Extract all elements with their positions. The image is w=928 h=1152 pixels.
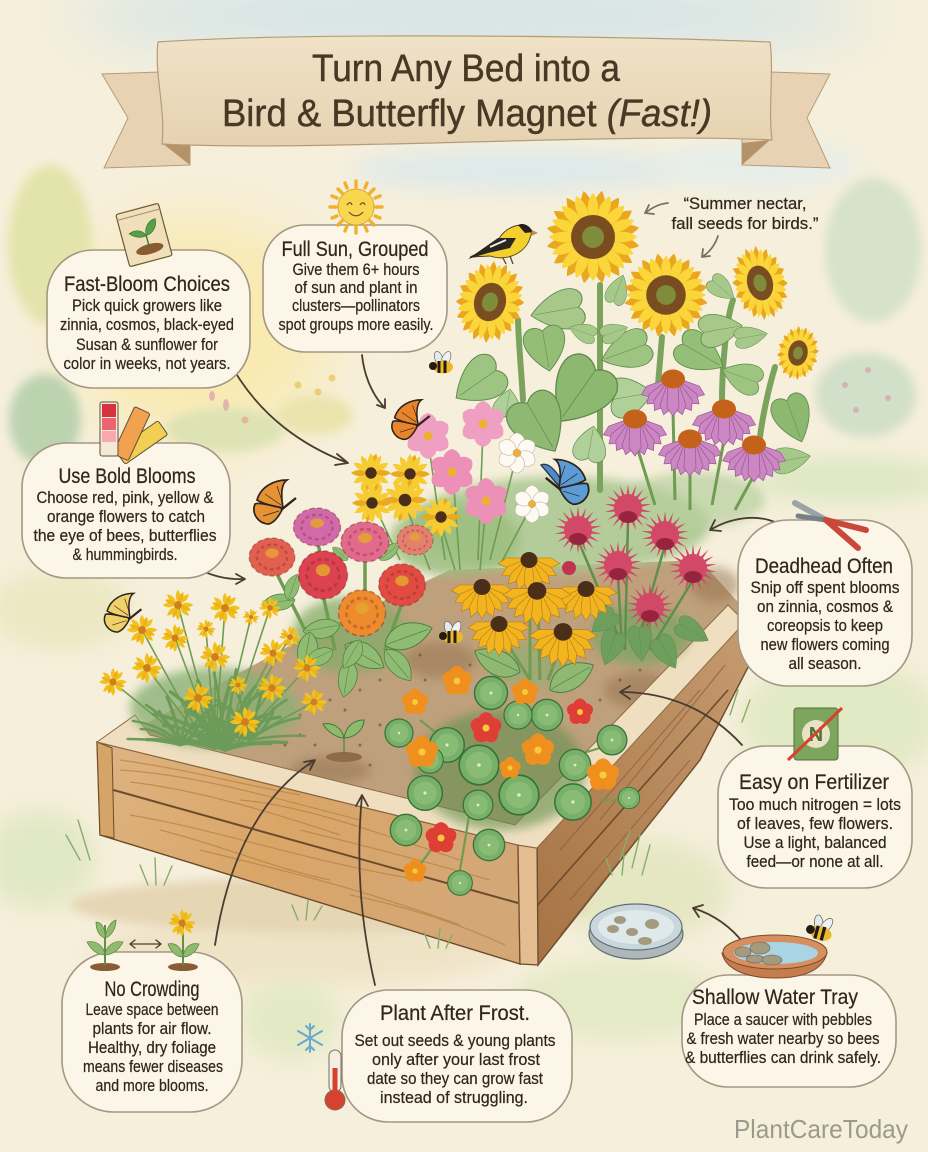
panel: plant after frost [342, 990, 572, 1122]
icon: spacing plants [87, 909, 199, 971]
zinnias [249, 508, 436, 699]
quote [672, 194, 819, 233]
body: bold blooms: Choose red, pink, yellow & [36, 489, 214, 507]
panel: deadhead often [738, 520, 912, 686]
butterfly: blue [541, 459, 589, 504]
coneflowers [601, 370, 788, 510]
bee balm with foliage [554, 484, 717, 674]
heading: deadhead: Deadhead Often [755, 554, 893, 578]
title banner [102, 36, 830, 168]
title text: Turn Any Bed into a [312, 48, 621, 90]
body: fertilizer: feed—or none at all. [746, 853, 884, 871]
icon: smiling sun [330, 181, 382, 233]
body: water tray [685, 1011, 881, 1067]
right face [537, 620, 757, 965]
panel: full sun [263, 225, 447, 352]
leaves [606, 373, 656, 420]
body: frost: Set out seeds & young plants [354, 1032, 556, 1050]
body: deadhead: coreopsis to keep [767, 617, 883, 635]
left tree wash [8, 165, 92, 325]
title text [222, 48, 712, 135]
sunflowers [439, 182, 827, 490]
body: no crowding: Leave space between [86, 1001, 218, 1019]
heading: fertilizer: Easy on Fertilizer [739, 770, 889, 794]
arrows [195, 203, 775, 985]
icon: pruners [795, 503, 866, 548]
body: bold blooms: & hummingbirds. [72, 546, 178, 564]
body: fertilizer: of leaves, few flowers. [737, 815, 893, 833]
goldfinch [468, 224, 538, 264]
body: water tray: & butterflies can drink safely. [685, 1049, 881, 1067]
icon: snowflake [298, 1024, 322, 1052]
body: frost: only after your last frost [372, 1051, 540, 1069]
panel: easy on fertilizer [718, 746, 912, 888]
body: full sun: clusters—pollinators [292, 297, 420, 315]
heading: full sun: Full Sun, Grouped [282, 237, 428, 261]
panel: fast-bloom choices [47, 250, 250, 388]
body: frost: instead of struggling. [380, 1089, 528, 1107]
body: no crowding [83, 1001, 223, 1095]
body: frost: date so they can grow fast [367, 1070, 543, 1088]
stems [518, 285, 775, 490]
body: fertilizer: Use a light, balanced [744, 834, 886, 852]
rim [97, 605, 745, 848]
foliage wash behind flowers [292, 472, 765, 687]
body: bold blooms: the eye of bees, butterflies [34, 527, 216, 545]
watermark: PlantCareToday [734, 1114, 908, 1144]
body: deadhead: Snip off spent blooms [750, 579, 900, 597]
body: no crowding: plants for air flow. [92, 1020, 212, 1038]
icon: fertilizer bag: N [809, 724, 823, 746]
body: fast-bloom: Susan & sunflower for [76, 336, 218, 354]
body: fertilizer: Too much nitrogen = lots [729, 796, 901, 814]
soil [125, 560, 745, 835]
body: no crowding: and more blooms. [96, 1077, 208, 1095]
icon: fertilizer bag [788, 708, 842, 760]
body: fast-bloom: zinnia, cosmos, black-eyed [60, 316, 234, 334]
heading: bold blooms: Use Bold Blooms [58, 464, 196, 488]
icon: terracotta dish with bee [722, 911, 836, 978]
body: fast-bloom: Pick quick growers like [72, 297, 222, 315]
right tree wash [825, 178, 921, 322]
grass tufts [66, 662, 865, 948]
heading: no crowding: No Crowding [104, 977, 200, 1001]
body: deadhead [750, 579, 900, 673]
body: fast-bloom: color in weeks, not years. [64, 355, 230, 373]
body: bold blooms [34, 489, 216, 564]
body: deadhead: new flowers coming [760, 636, 890, 654]
heading: frost: Plant After Frost. [380, 1001, 530, 1025]
large black-eyed susans [451, 552, 617, 700]
raised wooden bed [70, 560, 757, 965]
body: no crowding: means fewer diseases [83, 1058, 223, 1076]
body: water tray: Place a saucer with pebbles [694, 1011, 872, 1029]
icon: color swatches [100, 402, 168, 464]
sunflower heads [538, 182, 648, 292]
front face [97, 742, 520, 964]
yellow coreopsis clump [99, 590, 327, 750]
body: fertilizer [729, 796, 901, 871]
butterfly: monarch left [254, 480, 296, 524]
body: water tray: & fresh water nearby so bees [686, 1030, 880, 1048]
nasturtiums [385, 666, 640, 895]
body: full sun: spot groups more easily. [278, 316, 434, 334]
body: deadhead: all season. [788, 655, 862, 673]
corner post [518, 845, 538, 965]
title text: Bird & Butterfly Magnet (Fast!) [222, 93, 712, 135]
body: fast-bloom [60, 297, 234, 373]
bee over flowers [429, 350, 453, 374]
body: frost [354, 1032, 556, 1107]
heading: water tray: Shallow Water Tray [692, 985, 858, 1009]
body: full sun [278, 261, 434, 334]
seedling [323, 720, 364, 762]
panel: use bold blooms [22, 443, 230, 578]
background distant flowers [209, 367, 891, 424]
quote: “Summer nectar, [684, 194, 806, 213]
quote: fall seeds for birds.” [672, 214, 819, 233]
body: deadhead: on zinnia, cosmos & [757, 598, 893, 616]
body: full sun: Give them 6+ hours [292, 261, 420, 279]
panel: no crowding [62, 952, 242, 1112]
icon: thermometer [325, 1050, 345, 1110]
body: bold blooms: orange flowers to catch [47, 508, 205, 526]
heading: fast-bloom: Fast-Bloom Choices [64, 272, 230, 296]
cosmos and daisies [372, 401, 552, 570]
butterfly: yellow [104, 593, 141, 632]
small black-eyed susans [351, 453, 461, 537]
body: no crowding: Healthy, dry foliage [88, 1039, 216, 1057]
panel: shallow water tray [682, 975, 896, 1087]
bee near soil [439, 620, 463, 644]
body: full sun: of sun and plant in [294, 279, 418, 297]
soil speckles [285, 625, 700, 765]
butterfly: monarch top [392, 400, 430, 439]
gray saucer with pebbles [589, 904, 683, 959]
icon: seed packet [116, 203, 172, 267]
